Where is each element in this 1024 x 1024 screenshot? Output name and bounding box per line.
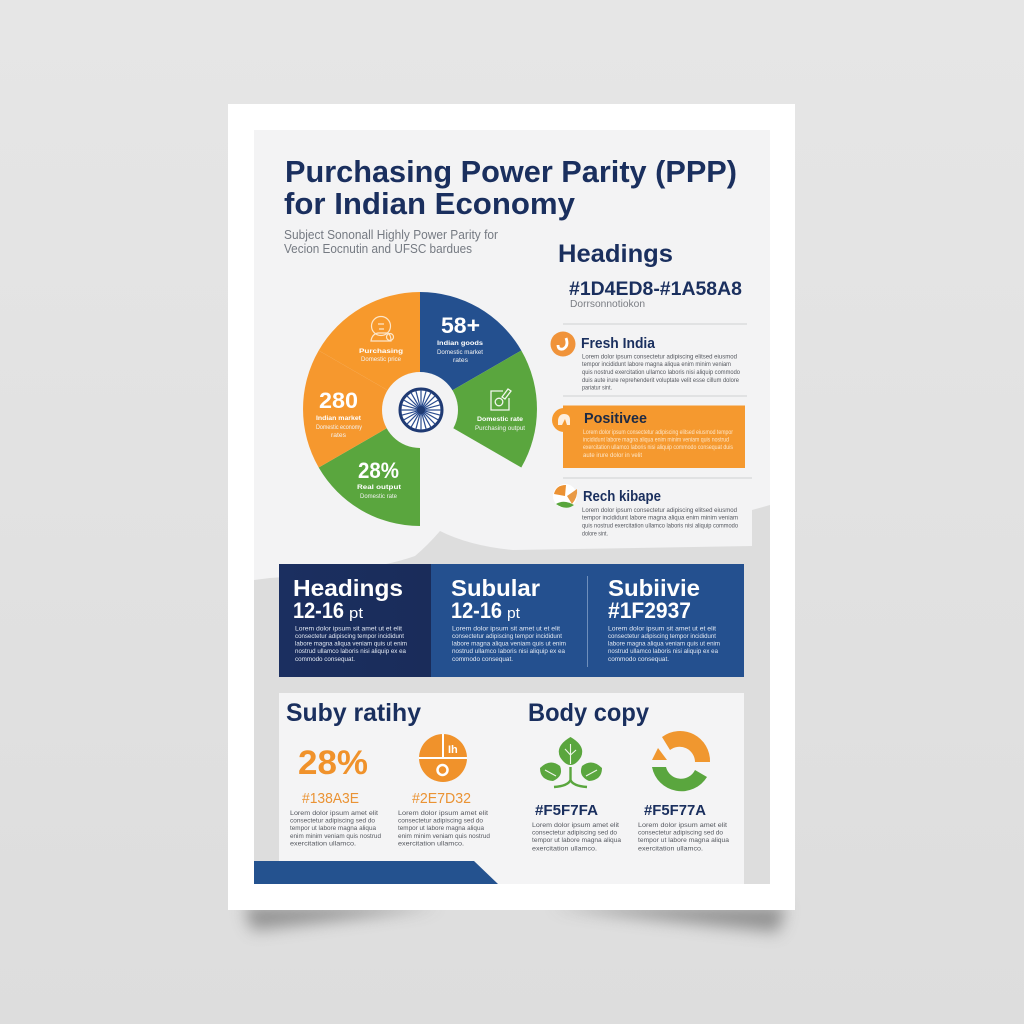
column: Subiivie: Lorem dolor ipsum sit amet ut et elit: [608, 626, 716, 632]
icon: tricolour badge: [553, 484, 577, 508]
item: Rech kibape: tempor incididunt labore magna aliqua enim minim veniam: [582, 514, 738, 522]
column: Subular: labore magna aliqua veniam quis ut enim: [452, 640, 566, 648]
column: Subiivie: consectetur adipiscing tempor incididunt: [608, 633, 716, 640]
paper shadow: [244, 906, 786, 932]
item: Rech kibape: Lorem dolor ipsum consectetur adipiscing elitsed eiusmod: [582, 507, 737, 514]
stat: 280: rates: [331, 433, 346, 439]
center hole: [382, 372, 458, 448]
stat: hex navy two: Lorem dolor ipsum amet elit: [638, 822, 727, 829]
stat: 28% orange: exercitation ullamco.: [290, 840, 356, 848]
column: Subiivie: [608, 575, 720, 663]
label: green right: [475, 416, 525, 432]
stat: hex orange: exercitation ullamco.: [398, 840, 464, 848]
sidebar heading: #1D4ED8-#1A58A8: [569, 279, 742, 300]
item: Rech kibape: dolore sint.: [582, 530, 608, 538]
subtitle: Vecion Eocnutin and UFSC bardues: [284, 242, 472, 256]
icon: orange green ring: [652, 731, 710, 791]
stat: hex navy one: [532, 802, 621, 852]
stat: hex navy one: consectetur adipiscing sed do: [532, 830, 617, 836]
heading: Suby ratihy: Suby ratihy: [286, 699, 421, 727]
icon: ashoka chakra: [400, 389, 442, 431]
item: Positivee: Lorem dolor ipsum consectetur adipiscing elitsed eiusmod tempor: [583, 429, 734, 436]
sidebar heading: Headings: [558, 240, 673, 268]
stat: 28% orange: [290, 744, 381, 848]
item: Fresh India: pariatur sint.: [582, 384, 612, 392]
title: [284, 154, 737, 221]
stat: 28% orange: tempor ut labore magna aliqua: [290, 825, 376, 832]
column: Subular: [451, 575, 566, 663]
column: Subular: 12-16: [451, 598, 502, 623]
title: Purchasing Power Parity (PPP): [285, 154, 737, 189]
stat: hex navy two: exercitation ullamco.: [638, 846, 703, 852]
item: Positivee: [552, 406, 745, 468]
stat: 28% orange: 28%: [298, 744, 368, 782]
segment: green bottom: [319, 409, 420, 526]
item: Rech kibape: Rech kibape: [583, 489, 661, 505]
item: Rech kibape: [553, 484, 738, 538]
sidebar heading: Dorrsonnotiokon: [570, 299, 645, 310]
column: Headings: Lorem dolor ipsum sit amet ut et elit: [295, 626, 402, 632]
stat: 58+: rates: [453, 358, 468, 364]
stat: 28%: Domestic rate: [360, 494, 398, 500]
stat: 28% orange: #138A3E: [302, 790, 359, 807]
stat: 58+: 58+: [441, 313, 480, 338]
icon: green plant: [540, 737, 602, 787]
stat: hex orange: tempor ut labore magna aliqua: [398, 825, 484, 832]
stat: 28%: [357, 458, 402, 500]
stat: hex navy two: tempor ut labore magna aliqua: [638, 837, 729, 844]
stat: 28% orange: enim minim veniam quis nostrud: [290, 833, 381, 840]
stat: hex navy one: Lorem dolor ipsum amet elit: [532, 822, 619, 829]
subtitle: [284, 228, 498, 256]
stat: hex orange: enim minim veniam quis nostrud: [398, 833, 490, 840]
stat: hex navy one: exercitation ullamco.: [532, 846, 597, 852]
segment: orange top: [319, 292, 420, 409]
column: Headings: pt: [349, 605, 364, 622]
column: Subiivie: commodo consequat.: [608, 656, 669, 663]
label: orange top: Domestic price: [361, 357, 402, 363]
blue corner ribbon: [254, 861, 498, 884]
icon: green segment: [491, 389, 511, 410]
stat: 28% orange: consectetur adipiscing sed do: [290, 818, 375, 824]
segment: orange left: [303, 350, 420, 468]
label: green right: Domestic rate: [477, 416, 523, 423]
item: Positivee: incididunt labore magna aliqua enim minim veniam quis nostrud: [583, 436, 729, 444]
column: Headings: commodo consequat.: [295, 656, 355, 663]
stat: 280: 280: [319, 388, 358, 413]
blue band: [279, 564, 744, 677]
stat: 58+: Domestic market: [437, 350, 483, 356]
item: Positivee: exercitation ullamco laboris nisi aliquip commodo consequat duis: [583, 444, 734, 451]
label: green right: Purchasing output: [475, 426, 525, 432]
stat: 28% orange: Lorem dolor ipsum amet elit: [290, 810, 378, 817]
item: Fresh India: Fresh India: [581, 336, 656, 352]
item: Fresh India: Lorem dolor ipsum consectetur adipiscing elitsed eiusmod: [582, 354, 737, 360]
icon: orange pie: [419, 734, 467, 782]
subtitle: Subject Sononall Highly Power Parity for: [284, 228, 498, 242]
title: for Indian Economy: [284, 186, 576, 221]
column: Subiivie: nostrud ullamco laboris nisi aliquip ex ea: [608, 648, 718, 655]
stat: hex orange: [398, 790, 490, 848]
label: orange top: Purchasing: [359, 348, 403, 355]
poster sheet: [228, 104, 795, 910]
column: Headings: Headings: [293, 575, 403, 601]
column: Headings: 12-16: [293, 598, 344, 623]
grey lower background: [254, 505, 770, 884]
item: Positivee: Positivee: [584, 410, 647, 427]
stat: 58+: Indian goods: [437, 340, 483, 347]
item: Fresh India: [550, 332, 740, 392]
stat: 280: [316, 388, 362, 439]
icon: orange segment: [371, 316, 394, 341]
bottom panel: [254, 693, 744, 884]
column: Subular: consectetur adipiscing tempor incididunt: [452, 633, 562, 640]
stat: hex orange: #2E7D32: [412, 790, 471, 807]
icon: orange badge: [550, 332, 576, 356]
stat: 280: Indian market: [316, 415, 362, 422]
column: Subiivie: #1F2937: [608, 598, 691, 623]
stat: 28%: Real output: [357, 484, 402, 491]
column: Subular: Lorem dolor ipsum sit amet ut et elit: [452, 626, 560, 632]
stat: 280: Domestic economy: [316, 425, 362, 431]
stat: hex orange: Lorem dolor ipsum amet elit: [398, 810, 488, 817]
column: Subular: Subular: [451, 575, 540, 601]
stat: hex orange: consectetur adipiscing sed do: [398, 818, 483, 824]
stat: 28%: 28%: [358, 458, 399, 483]
pie chart: [303, 292, 537, 526]
stat: hex navy two: consectetur adipiscing sed do: [638, 830, 723, 836]
column: Headings: labore magna aliqua veniam quis ut enim: [295, 640, 407, 648]
icon: orange pie: Ih: [448, 744, 458, 756]
segment: blue: [420, 292, 521, 409]
icon: orange tab: [552, 408, 576, 432]
stat: hex navy one: #F5F7FA: [535, 802, 598, 819]
column: Subular: commodo consequat.: [452, 656, 513, 663]
stat: hex navy one: tempor ut labore magna aliqua: [532, 837, 621, 844]
stat: hex navy two: #F5F77A: [644, 802, 706, 819]
item: Fresh India: quis nostrud exercitation ullamco laboris nisi aliquip commodo: [582, 369, 740, 376]
column: Headings: [293, 575, 407, 663]
item: Rech kibape: quis nostrud exercitation ullamco laboris nisi aliquip commodo: [582, 522, 738, 530]
column: Headings: consectetur adipiscing tempor incididunt: [295, 633, 404, 640]
heading: Body copy: Body copy: [528, 699, 649, 727]
label: orange top: [359, 348, 403, 363]
column: Subular: nostrud ullamco laboris nisi aliquip ex ea: [452, 648, 565, 655]
segment: green right: [420, 350, 537, 468]
inner panel: [254, 130, 770, 884]
column: Subiivie: Subiivie: [608, 575, 700, 601]
column: Subular: pt: [507, 605, 521, 622]
stat: 58+: [437, 313, 483, 364]
item: Fresh India: tempor incididunt labore magna aliqua enim minim veniam: [582, 361, 731, 368]
item: Positivee: aute irure dolor in velit: [583, 452, 642, 459]
column: Subiivie: labore magna aliqua veniam quis ut enim: [608, 640, 720, 648]
item: Fresh India: duis aute irure reprehenderit voluptate velit esse cillum dolore: [582, 377, 739, 384]
sidebar heading: [558, 240, 742, 310]
stat: hex navy two: [638, 802, 729, 852]
column: Headings: nostrud ullamco laboris nisi aliquip ex ea: [295, 648, 406, 655]
